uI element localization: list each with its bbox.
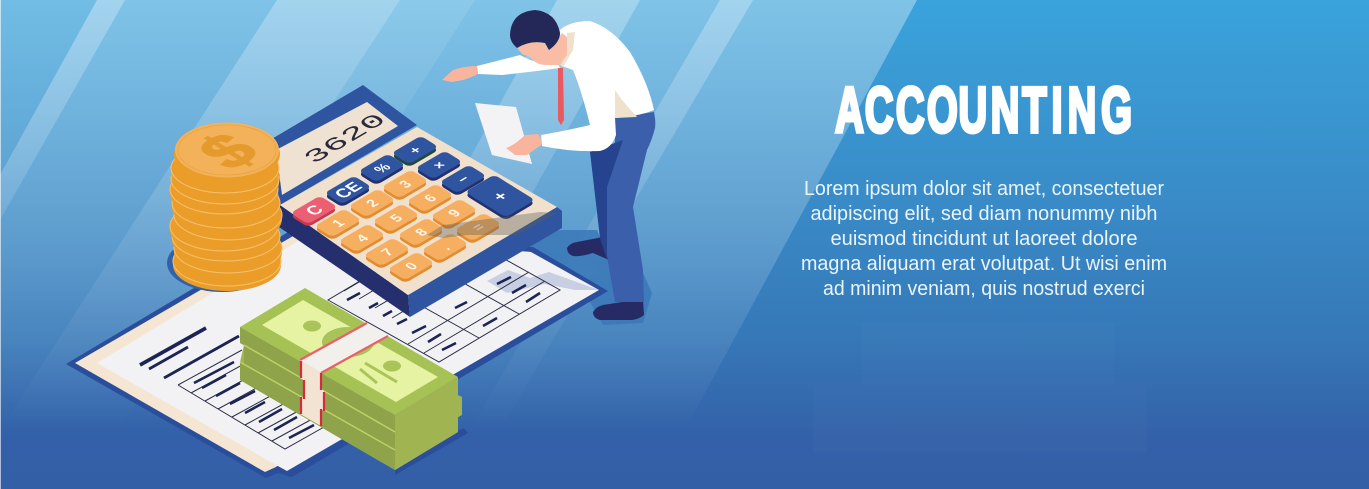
number keys: 4 [352, 232, 372, 244]
number keys: . [437, 242, 453, 252]
body text: ad minim veniam, quis nostrud exerci [823, 278, 1145, 300]
man [442, 10, 655, 320]
calculator body [270, 85, 417, 205]
key: percent [358, 154, 406, 185]
calculator display [276, 102, 398, 195]
bottom layer [240, 362, 395, 470]
money bundle [240, 288, 468, 475]
number keys: 9 [444, 207, 464, 219]
body text: magna aliquam erat volutpat. Ut wisi enim [801, 253, 1167, 275]
dollar sign: $ [182, 123, 274, 179]
calculator [270, 85, 562, 317]
key: multiply [415, 151, 463, 182]
key: big plus: + [488, 189, 513, 204]
key: C [290, 196, 338, 227]
hand shadow on keys [427, 212, 557, 238]
number keys: 6 [420, 192, 440, 204]
key: CE [324, 176, 372, 207]
number keys [314, 170, 502, 283]
key: plus: + [405, 144, 425, 156]
money shadow [395, 428, 468, 475]
body text: Lorem ipsum dolor sit amet, consectetuer [804, 178, 1164, 200]
front shoe [593, 300, 644, 320]
key: minus: − [453, 173, 473, 185]
pointing arm [477, 55, 560, 75]
key: big plus [465, 175, 535, 220]
display digits: 3620 [298, 110, 394, 168]
paper document [66, 219, 608, 478]
key: multiply: × [429, 159, 449, 171]
number keys: 0 [401, 260, 421, 272]
title: ACCOUNTING [835, 76, 1132, 146]
pointing hand [442, 66, 478, 82]
coin stack [167, 122, 282, 292]
document heading lines [140, 328, 239, 378]
coin face [175, 122, 279, 178]
body text: euismod tincidunt ut laoreet dolore [830, 228, 1138, 250]
bundle backing [240, 327, 462, 470]
key: minus [439, 165, 487, 196]
tie [558, 68, 564, 125]
number keys: 1 [328, 217, 348, 229]
holding hand [506, 134, 541, 155]
coin shadow [167, 234, 277, 292]
key: C: C [301, 202, 328, 218]
held paper [475, 103, 532, 164]
key: CE: CE [330, 179, 367, 201]
key: percent: % [370, 160, 395, 175]
key: plus [391, 136, 439, 167]
number keys: 8 [411, 226, 431, 238]
collar [560, 32, 575, 67]
top layer [240, 327, 395, 431]
number keys: = [468, 221, 488, 233]
number keys: 2 [362, 197, 382, 209]
left table [178, 350, 340, 449]
number keys: 7 [377, 246, 397, 258]
trousers [590, 112, 655, 302]
body text [801, 178, 1167, 300]
middle layer [244, 345, 395, 452]
right table [328, 219, 560, 362]
body text: adipiscing elit, sed diam nonummy nibh [810, 203, 1158, 225]
paper band [300, 323, 388, 426]
back shoe [567, 237, 609, 260]
man floor shadow [527, 230, 652, 325]
hair [510, 10, 560, 50]
shirt [541, 21, 654, 151]
number keys: 3 [395, 178, 415, 190]
number keys: 5 [386, 212, 406, 224]
face [517, 33, 567, 65]
